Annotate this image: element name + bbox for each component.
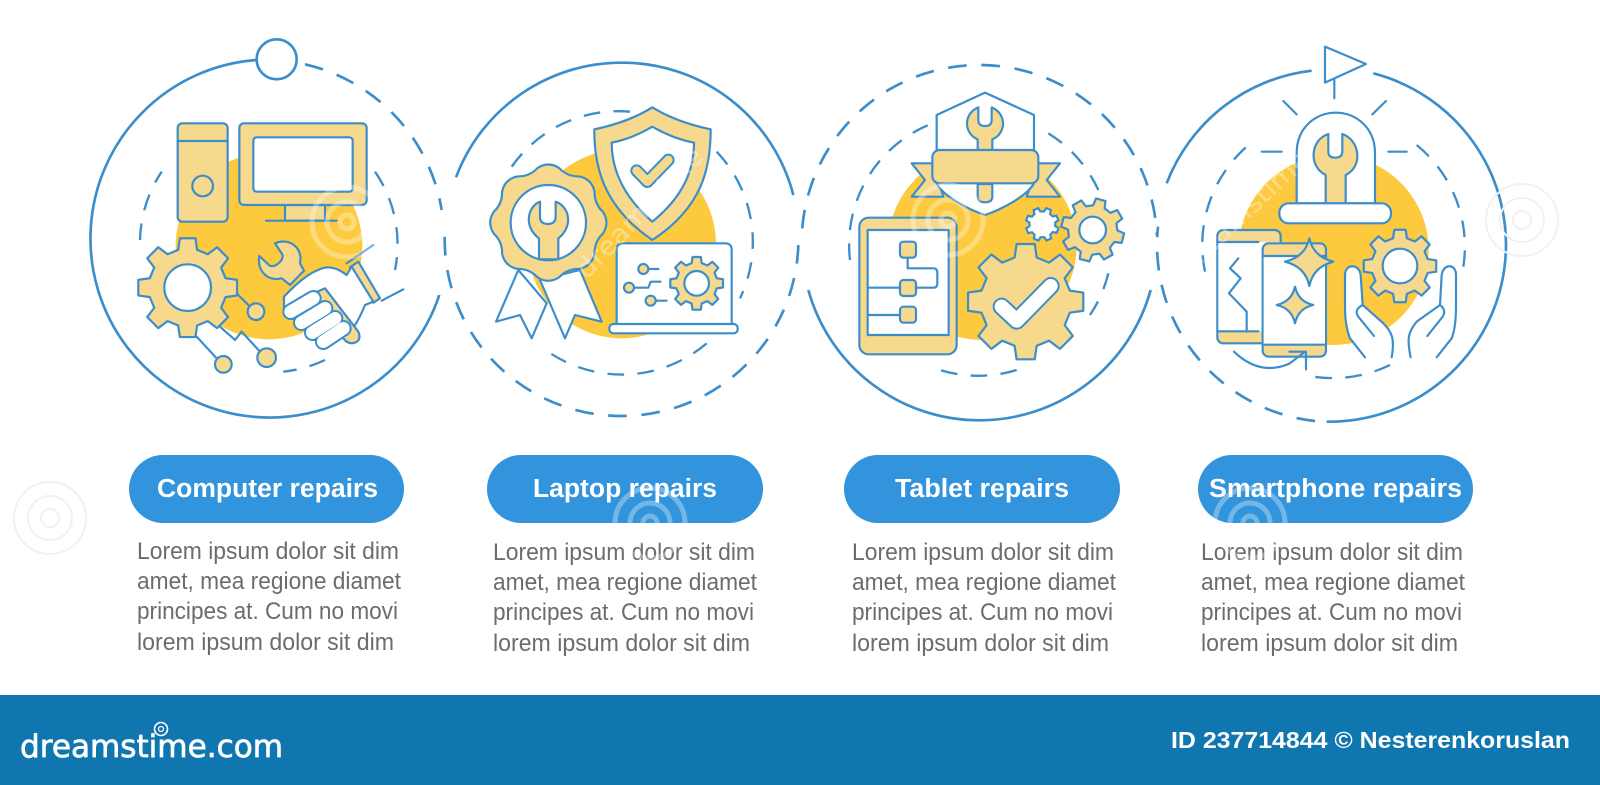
footer logo: dreamstime.com: dreamstime.com — [20, 729, 283, 765]
icon: flag marker — [1325, 47, 1366, 98]
icon: siren with wrench — [1279, 101, 1391, 223]
text block: laptop repairs: lorem ipsum dolor sit dim — [493, 630, 750, 657]
pill: computer repairs — [129, 455, 404, 523]
watermark: spirals and diagonal marks: dreamstime — [1171, 144, 1316, 282]
icon: award rosette — [490, 165, 606, 338]
panel: tablet repairs illustration — [802, 65, 1157, 420]
panel: computer repairs illustration — [90, 39, 442, 418]
text block: tablet repairs: principes at. Cum no movi — [852, 599, 1113, 626]
icon: cracked phone — [1217, 230, 1281, 343]
text block: computer repairs — [137, 538, 401, 656]
text block: smartphone repairs — [1201, 539, 1465, 657]
yellow backdrop circle: laptop — [527, 150, 716, 338]
outer ring: tablet — [802, 65, 1157, 420]
icon: laptop with gear — [609, 243, 738, 333]
outer ring: smartphone — [1157, 71, 1506, 422]
pill: tablet repairs — [844, 455, 1120, 523]
icon: open hands with gear — [1345, 230, 1456, 357]
text block: tablet repairs: lorem ipsum dolor sit dim — [852, 630, 1109, 657]
text block: tablet repairs: Lorem ipsum dolor sit dim — [852, 539, 1114, 566]
icon: repaired phone with sparkles — [1263, 238, 1333, 357]
text block: computer repairs: amet, mea regione diamet — [137, 568, 401, 595]
pill: smartphone repairs: Smartphone repairs — [1209, 475, 1462, 503]
text block: smartphone repairs: lorem ipsum dolor sit dim — [1201, 630, 1458, 657]
arrow: swap between phones — [1234, 352, 1306, 369]
pill: laptop repairs: Laptop repairs — [533, 475, 717, 503]
text block: computer repairs: Lorem ipsum dolor sit dim — [137, 538, 399, 565]
pill: computer repairs: Computer repairs — [157, 475, 378, 503]
panel: laptop repairs illustration — [445, 63, 798, 416]
pill: tablet repairs: Tablet repairs — [895, 475, 1069, 503]
text block: computer repairs: lorem ipsum dolor sit dim — [137, 629, 394, 656]
footer banner — [0, 695, 1600, 785]
icon: circuit nodes — [197, 293, 276, 373]
icon: large gear with check — [968, 244, 1083, 359]
icon: large gear — [138, 238, 237, 337]
icon: computer tower — [178, 123, 228, 222]
icon: small gears — [1021, 192, 1131, 268]
inner dashed ring: smartphone — [1202, 145, 1465, 378]
text block: tablet repairs: amet, mea regione diamet — [852, 569, 1116, 596]
yellow backdrop circle: computer — [176, 153, 362, 339]
icon: shield with check — [594, 107, 711, 240]
text block: smartphone repairs: Lorem ipsum dolor sit dim — [1201, 539, 1463, 566]
icon: monitor — [239, 123, 367, 221]
watermark: spirals and diagonal marks — [14, 142, 1558, 558]
panel: smartphone repairs illustration — [1157, 47, 1506, 422]
icon: tablet with flowchart — [859, 218, 957, 354]
footer credit: image id and author: ID 237714844 © Nesterenkoruslan — [1171, 727, 1570, 753]
text block: tablet repairs — [852, 539, 1116, 657]
icon: wrench badge with ribbon — [912, 93, 1060, 215]
text block: laptop repairs: principes at. Cum no movi — [493, 599, 754, 626]
text block: laptop repairs: amet, mea regione diamet — [493, 569, 757, 596]
outer ring: computer — [90, 39, 442, 418]
yellow backdrop circle: smartphone — [1239, 155, 1429, 345]
yellow backdrop circle: tablet — [888, 151, 1077, 340]
icon: hand holding wrench — [259, 242, 403, 345]
text block: smartphone repairs: principes at. Cum no movi — [1201, 599, 1462, 626]
inner dashed ring: tablet — [849, 125, 1108, 376]
text block: smartphone repairs: amet, mea regione diamet — [1201, 569, 1465, 596]
text block: laptop repairs: Lorem ipsum dolor sit dim — [493, 539, 755, 566]
text block: computer repairs: principes at. Cum no movi — [137, 598, 398, 625]
pill: smartphone repairs — [1198, 455, 1473, 523]
text block: laptop repairs — [493, 539, 757, 657]
pill: laptop repairs — [487, 455, 763, 523]
outer ring: laptop — [445, 63, 798, 416]
inner dashed ring: computer — [140, 172, 398, 372]
inner dashed ring: laptop — [512, 111, 753, 375]
watermark: spirals and diagonal marks: dreamstime — [570, 142, 710, 285]
